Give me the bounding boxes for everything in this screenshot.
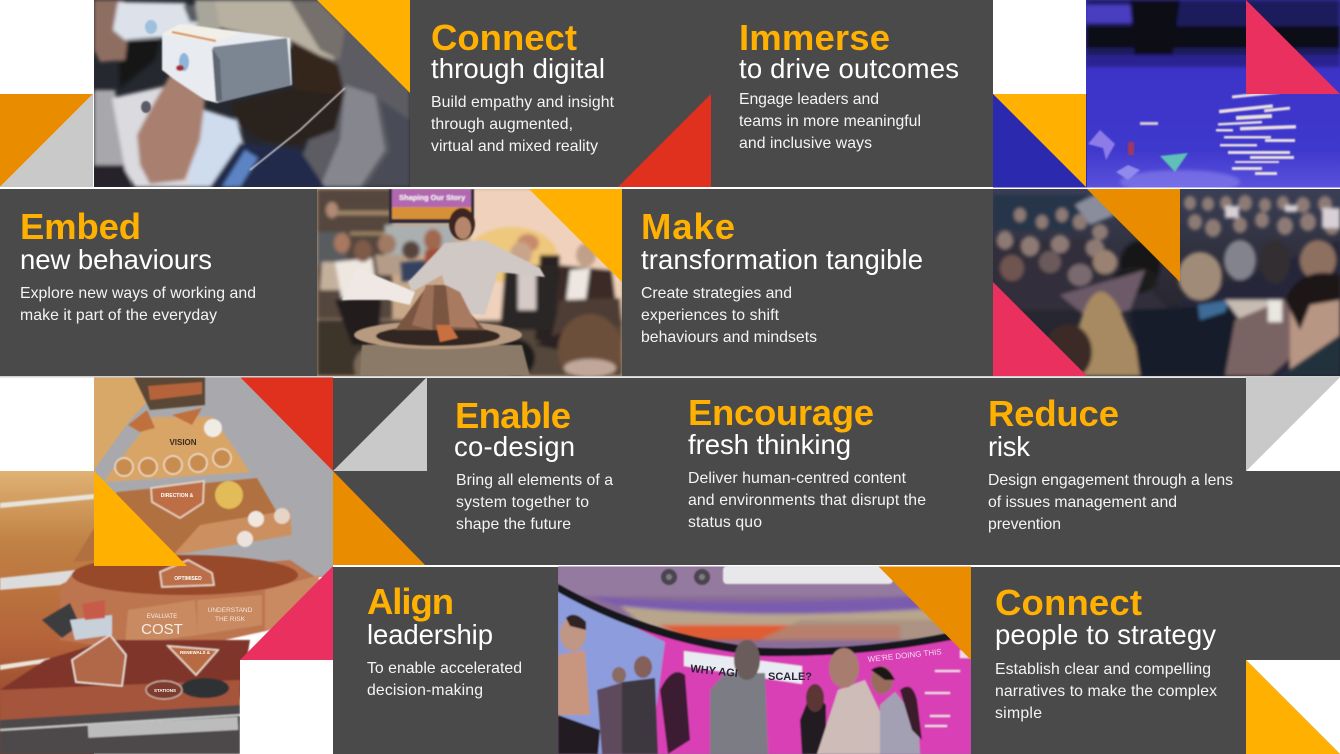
body: Create strategies and: [641, 285, 792, 302]
shape: red triangle illustration: [240, 377, 333, 471]
photo: group in front of curved pink LED screen: WHY AGI: [690, 663, 738, 680]
illustration: layered asset-management pyramid: EVALUATE: [147, 614, 177, 620]
shape: grey triangle row 1 left: [0, 94, 93, 187]
illustration: layered asset-management pyramid: UNDERSTAND: [208, 607, 253, 614]
shape: white triangle row 3 right: [1246, 377, 1340, 471]
body: behaviours and mindsets: [641, 329, 817, 346]
heading: Connect: [995, 582, 1142, 623]
shape: pink triangle row 2 audience: [993, 282, 1087, 376]
body: Bring all elements of a: [456, 472, 613, 489]
shape: pink triangle illustration: [240, 566, 333, 660]
text block: Align leadership: [367, 581, 522, 699]
shape: yellow triangle row 4 right: [1246, 660, 1340, 754]
illustration: layered asset-management pyramid: VISION: [169, 438, 197, 447]
heading: Enable: [455, 395, 571, 436]
text block: Encourage fresh thinking: [688, 392, 926, 531]
illustration: layered asset-management pyramid: STATIONS: [154, 688, 176, 693]
subheading: to drive outcomes: [739, 53, 959, 84]
body: [367, 660, 522, 699]
shape: orange triangle row 1 left: [0, 94, 93, 187]
panel: row 1 dark band: [410, 0, 993, 187]
heading: Encourage: [688, 392, 874, 433]
photo: group in front of curved pink LED screen: SCALE?: [768, 671, 812, 683]
body: [739, 91, 921, 152]
body: Deliver human-centred content: [688, 470, 907, 487]
photo: blue projection stage: [990, 0, 1340, 194]
text block: Enable co-design: [454, 395, 613, 533]
photo: group in front of curved pink LED screen: WE'RE DOING THIS: [867, 647, 942, 664]
body: Explore new ways of working and: [20, 285, 256, 302]
subheading: fresh thinking: [688, 429, 851, 460]
subheading: people to strategy: [995, 619, 1216, 650]
divider row 1-2: [0, 188, 1340, 189]
body: simple: [995, 705, 1042, 722]
photo: presenter at campfire workshop: Shaping Our Story: [399, 193, 466, 202]
body: [641, 285, 817, 346]
subheading: risk: [988, 431, 1030, 462]
panel: row 3 dark band: [333, 378, 1340, 565]
illustration: layered asset-management pyramid: RENEWALS &: [180, 650, 211, 655]
body: [688, 470, 926, 531]
body: make it part of the everyday: [20, 307, 217, 324]
body: [456, 472, 613, 533]
subheading: new behaviours: [20, 244, 212, 275]
body: prevention: [988, 516, 1061, 533]
body: shape the future: [456, 516, 571, 533]
photo: presenter at campfire workshop: [317, 189, 622, 386]
panel: row 2 centre dark band: [622, 189, 993, 376]
shape: yellow triangle row 1 right: [993, 94, 1086, 187]
heading: Reduce: [988, 393, 1119, 434]
heading: Connect: [431, 17, 577, 58]
text block: Connect through digital: [431, 17, 615, 155]
body: Establish clear and compelling: [995, 661, 1211, 678]
subheading: transformation tangible: [641, 244, 923, 275]
shape: white triangle row 4 right: [1246, 660, 1340, 754]
photo: seated conference audience: [993, 189, 1340, 380]
subheading: through digital: [431, 53, 605, 84]
panel: row 2 left dark band: [0, 189, 317, 376]
heading: Align: [367, 581, 454, 622]
panel: row 4 right dark band: [971, 567, 1340, 754]
body: To enable accelerated: [367, 660, 522, 677]
subheading: co-design: [454, 431, 575, 462]
body: status quo: [688, 514, 762, 531]
text block: Embed new behaviours: [20, 206, 256, 324]
text block: Connect people to strategy: [995, 582, 1217, 722]
shape: red triangle row 1: [618, 94, 711, 187]
body: experiences to shift: [641, 307, 780, 324]
panel: row 4 left dark band: [333, 567, 558, 754]
illustration: layered asset-management pyramid: [0, 377, 333, 754]
body: and inclusive ways: [739, 135, 872, 152]
body: Engage leaders and: [739, 91, 879, 108]
text block: Reduce risk: [988, 393, 1233, 533]
body: narratives to make the complex: [995, 683, 1217, 700]
text block: Make transformation tangible: [641, 206, 923, 346]
photo: woman wearing cardboard VR headset: [94, 0, 410, 187]
illustration: layered asset-management pyramid: DIRECTION &: [161, 493, 194, 499]
body: Build empathy and insight: [431, 94, 615, 111]
divider row 2-3: [0, 376, 1340, 378]
shape: orange triangle row 2 audience: [1087, 189, 1180, 282]
body: [20, 285, 256, 324]
body: [431, 94, 615, 155]
illustration: layered asset-management pyramid: OPTIMISED: [174, 576, 202, 582]
body: decision-making: [367, 682, 483, 699]
heading: Immerse: [739, 17, 890, 58]
shape: grey triangle row 3 right: [1246, 377, 1340, 471]
body: through augmented,: [431, 116, 573, 133]
body: virtual and mixed reality: [431, 138, 598, 155]
heading: Embed: [20, 206, 141, 247]
shape: orange triangle row 4 photo: [878, 566, 971, 660]
shape: grey triangle row 3: [333, 377, 427, 471]
divider row 3-4: [333, 565, 1340, 566]
heading: Make: [641, 206, 735, 247]
body: teams in more meaningful: [739, 113, 921, 130]
shape: yellow triangle illustration: [94, 471, 187, 566]
illustration: layered asset-management pyramid: COST: [141, 621, 183, 638]
subheading: leadership: [367, 619, 493, 650]
body: system together to: [456, 494, 589, 511]
shape: orange triangle row 3: [333, 471, 426, 566]
body: [995, 661, 1217, 722]
text block: Immerse to drive outcomes: [739, 17, 959, 152]
illustration: layered asset-management pyramid: THE RISK: [215, 616, 246, 623]
shape: yellow triangle row 1 photo: [317, 0, 410, 93]
photo: group in front of curved pink LED screen: [558, 566, 971, 754]
body: [988, 472, 1233, 533]
body: of issues management and: [988, 494, 1177, 511]
shape: pink triangle row 1 right: [1246, 0, 1340, 94]
body: and environments that disrupt the: [688, 492, 926, 509]
body: Design engagement through a lens: [988, 472, 1233, 489]
shape: yellow triangle row 2 photo: [529, 189, 622, 282]
